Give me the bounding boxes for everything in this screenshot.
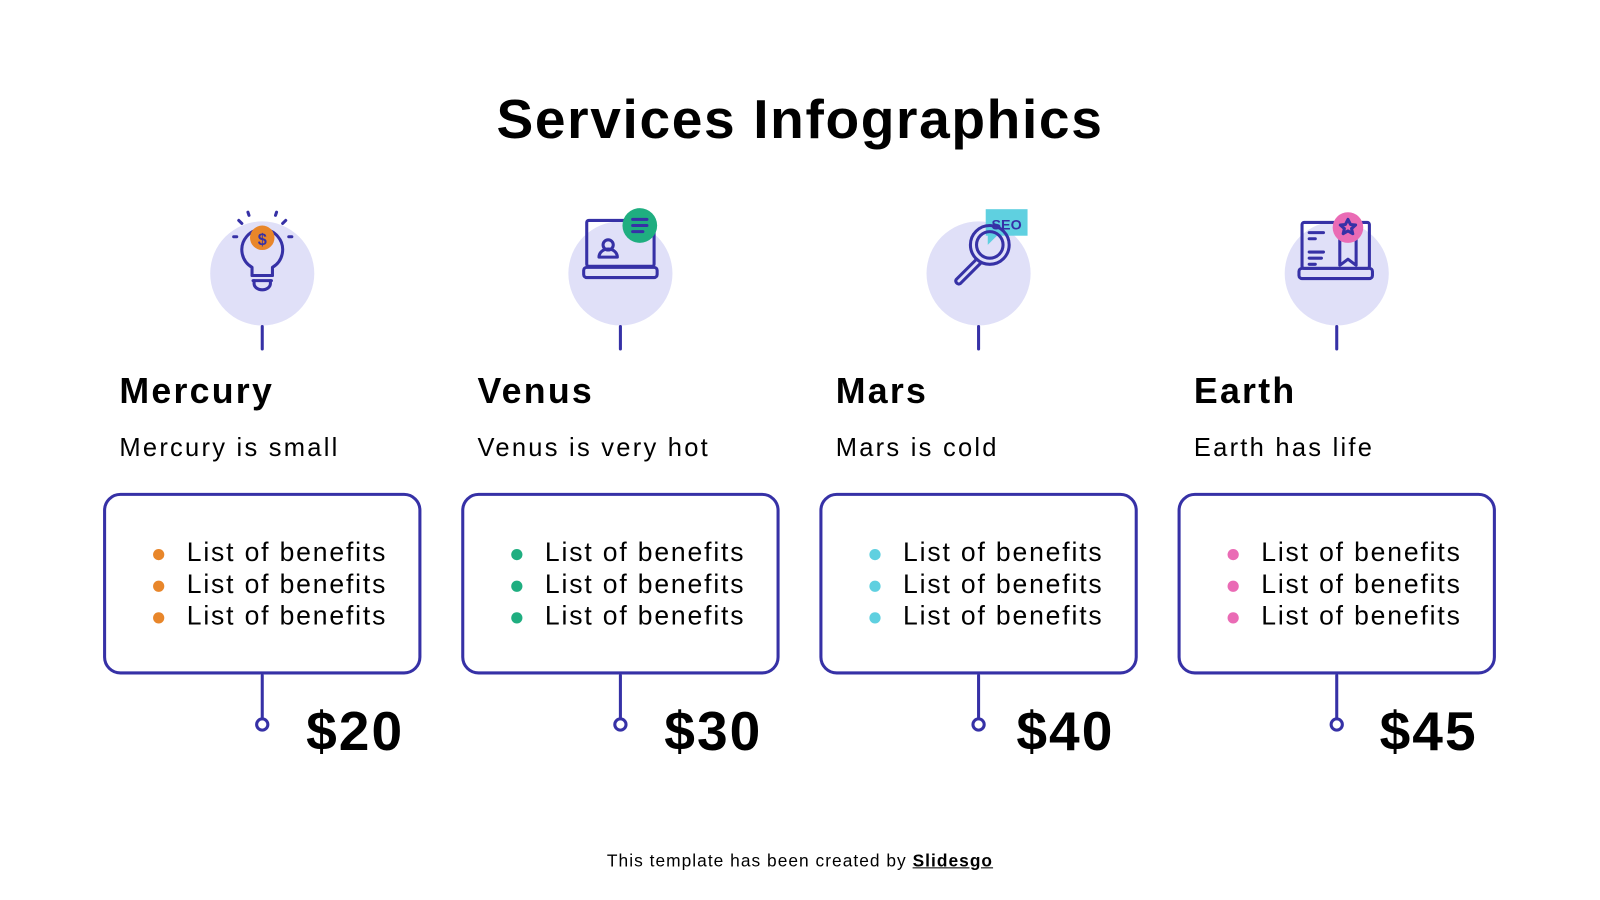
heading: Earth: Earth xyxy=(1194,371,1296,411)
panel: Earth benefits xyxy=(1178,493,1496,674)
panel: Mercury benefits: List of benefits xyxy=(187,537,387,567)
heading: Mercury: Mercury xyxy=(119,371,274,411)
panel: Venus benefits: List of benefits xyxy=(545,537,745,567)
text: Mars: Mars is cold xyxy=(836,434,999,462)
panel: Mercury benefits: List of benefits xyxy=(187,568,387,599)
text: Mercury: Mercury is small xyxy=(119,434,340,462)
icon: SEO magnifier: SEO xyxy=(992,218,1022,234)
price: $20: $20 xyxy=(306,701,404,762)
price: $30: $30 xyxy=(664,701,762,762)
panel: Venus benefits: List of benefits xyxy=(545,568,745,599)
panel: Earth benefits: List of benefits xyxy=(1261,568,1462,599)
heading: Venus: Venus xyxy=(478,371,594,411)
text: Venus: Venus is very hot xyxy=(478,434,710,462)
panel: Venus benefits xyxy=(461,493,780,674)
price: $45: $45 xyxy=(1380,701,1478,762)
panel: Mercury benefits xyxy=(103,493,421,674)
icon: certificate laptop xyxy=(1285,212,1389,349)
icon: lightbulb: $ xyxy=(258,231,267,249)
panel: Mercury benefits: List of benefits xyxy=(187,600,387,631)
panel: Venus benefits: List of benefits xyxy=(545,600,745,631)
panel: Mars benefits xyxy=(819,493,1138,674)
connectors to prices xyxy=(257,676,1342,730)
icon: laptop with chat xyxy=(568,208,672,349)
panel: Mars benefits: List of benefits xyxy=(903,568,1104,599)
panel: Mars benefits: List of benefits xyxy=(903,537,1104,567)
icon: lightbulb xyxy=(210,212,314,349)
footer: This template has been created by Slidesgo xyxy=(607,851,993,870)
panel: Earth benefits: List of benefits xyxy=(1261,600,1462,631)
panel: Earth benefits: List of benefits xyxy=(1261,537,1462,567)
heading: Mars: Mars xyxy=(836,371,928,411)
panel: Mars benefits: List of benefits xyxy=(903,600,1104,631)
icon: SEO magnifier xyxy=(927,209,1031,349)
text: Earth: Earth has life xyxy=(1194,434,1374,462)
price: $40: $40 xyxy=(1016,701,1114,762)
title: Services Infographics xyxy=(497,89,1103,150)
